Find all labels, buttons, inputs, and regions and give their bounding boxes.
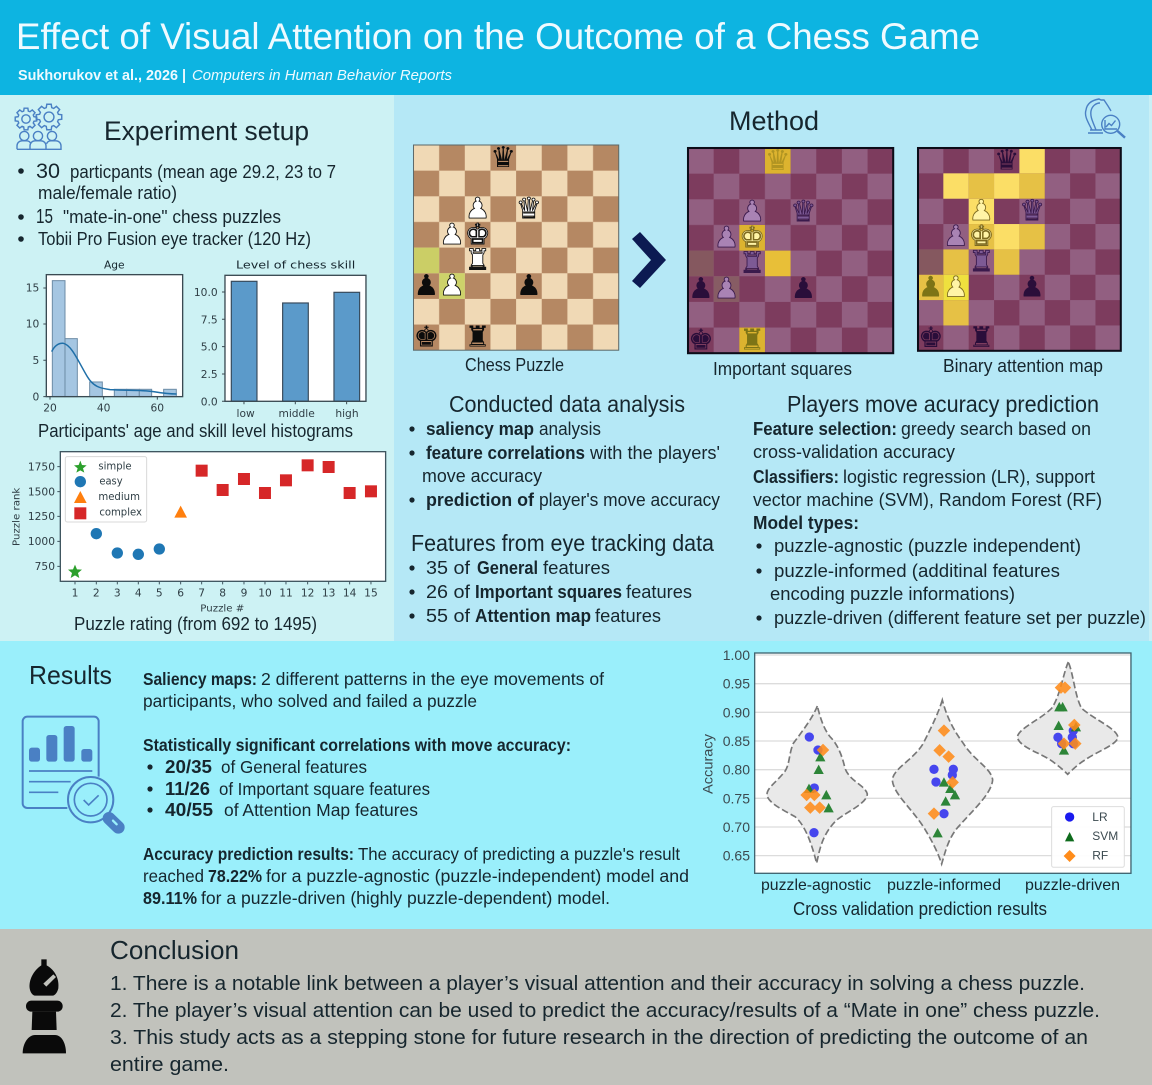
y axis labels: 0.80: [723, 762, 750, 778]
board: important squares: ♟: [739, 194, 765, 228]
text block: players move accuracy prediction: greedy search based on: [901, 419, 1091, 439]
panel: experiment setup: [11, 104, 386, 634]
board: chess puzzle: ♟: [413, 268, 439, 302]
text block: features from eye tracking data: 26 of: [426, 582, 471, 602]
text block: saliency maps: 2 different patterns in the eye movements of: [261, 669, 604, 689]
board: binary attention map: ♟: [1019, 270, 1045, 303]
chart: cross validation violin plot: [700, 647, 1131, 873]
y axis labels: 0.70: [723, 819, 750, 835]
chart: age histogram: 40: [97, 402, 111, 415]
board: binary attention map: ♛: [1019, 194, 1045, 227]
board: important squares: ♚: [688, 322, 714, 356]
chart: age histogram: 5: [33, 354, 39, 367]
board: binary attention map: [918, 144, 1121, 354]
board: binary attention map: ♜: [969, 245, 994, 278]
text block: accuracy prediction results: 89.11%: [143, 888, 197, 908]
y axis labels: Accuracy: [700, 734, 716, 794]
conclusion list: [110, 972, 1100, 1076]
chart: puzzle rating scatter: 13: [322, 587, 335, 600]
chart: puzzle rating scatter: 1: [72, 587, 78, 600]
chart: puzzle rating scatter: 4: [135, 587, 142, 600]
citation: Sukhorukov et al., 2026 |: [18, 67, 186, 84]
scatter legend: simple: [98, 459, 132, 472]
text block: conducted data analysis: Conducted data analysis: [449, 391, 685, 417]
chart: level of chess skill: 2.5: [201, 368, 218, 381]
chart: puzzle rating scatter: 14: [343, 587, 357, 600]
chart: puzzle rating scatter: Puzzle #: [200, 603, 244, 614]
chart: age histogram: 15: [26, 282, 39, 295]
y axis labels: 1.00: [723, 647, 750, 663]
chart: level of chess skill: 10.0: [194, 286, 218, 299]
board: important squares: ♟: [791, 271, 816, 305]
conclusion list: 1. There is a notable link between a player’s visual attention and their accuracy in solving a chess puzzle.: [110, 972, 1085, 995]
board: chess puzzle: ♜: [465, 242, 491, 276]
conclusion list: 2. The player’s visual attention can be used to predict the accuracy/results of a “Mate in one” chess puzzle.: [110, 999, 1100, 1022]
chart: puzzle rating scatter: 9: [241, 587, 248, 600]
board: chess puzzle: ♚: [465, 217, 491, 251]
caption: histograms: Participants' age and skill level histograms: [38, 421, 353, 441]
text block: features from eye tracking data: Important squares: [475, 582, 622, 602]
setup bullet list: [18, 160, 336, 249]
text block: accuracy prediction results: Accuracy prediction results:: [143, 844, 354, 864]
chart: puzzle rating scatter: 10: [258, 587, 272, 600]
chart: level of chess skill: high: [335, 407, 359, 420]
scatter legend: complex: [99, 506, 142, 519]
text block: saliency maps: Saliency maps:: [143, 669, 257, 689]
violin x labels: [761, 877, 1120, 894]
icon: knight with magnifier: [1085, 99, 1125, 138]
board: chess puzzle: ♜: [465, 319, 491, 353]
scatter legend: [65, 457, 147, 522]
chart: age histogram: 10: [26, 318, 40, 331]
violin legend: [1052, 807, 1124, 867]
panel: results: [23, 647, 1131, 919]
text block: players move accuracy prediction: logistic regression (LR), support: [843, 467, 1095, 487]
chart: level of chess skill: [194, 259, 366, 420]
chart: age histogram: 60: [151, 402, 164, 415]
chart: puzzle rating scatter: 3: [114, 587, 121, 600]
citation: Computers in Human Behavior Reports: [192, 67, 452, 84]
setup bullet list: particpants (mean age 29.2, 23 to 7: [70, 162, 336, 182]
chart: level of chess skill: Level of chess skill: [236, 259, 355, 272]
chart: puzzle rating scatter: 12: [301, 587, 314, 600]
text block: players move accuracy prediction: encoding puzzle informations): [770, 584, 1015, 604]
icon: report with magnifier: [23, 717, 118, 827]
board: chess puzzle: ♟: [439, 217, 465, 251]
violin points: LR: [805, 726, 1078, 837]
heading: experiment setup: Experiment setup: [104, 116, 309, 146]
chart: age histogram: [26, 259, 183, 415]
text block: conducted data analysis: analysis: [539, 419, 601, 439]
text block: statistically significant correlations: [143, 735, 571, 820]
setup bullet list: Tobii Pro Fusion eye tracker (120 Hz): [38, 229, 311, 249]
text block: players move accuracy prediction: Classifiers:: [753, 467, 839, 487]
setup bullet list: 30: [36, 160, 60, 183]
chart: puzzle rating scatter: 6: [177, 587, 184, 600]
violin x labels: puzzle-informed: [887, 877, 1001, 894]
icon: gears and people: [15, 104, 62, 149]
text block: accuracy prediction results: for a puzzle-agnostic (puzzle-independent) model and: [266, 866, 689, 886]
setup bullet list: male/female ratio): [38, 183, 177, 203]
text block: players move accuracy prediction: Players move acuracy prediction: [787, 391, 1099, 417]
chart: puzzle rating scatter: 750: [35, 560, 55, 573]
board: binary attention map: ♚: [969, 220, 994, 253]
board: chess puzzle: ♛: [490, 140, 516, 174]
text block: features from eye tracking data: [409, 530, 714, 626]
caption: puzzle rating: Puzzle rating (from 692 to 1495): [74, 614, 317, 634]
chart: puzzle rating scatter: 15: [364, 587, 378, 600]
board: important squares: ♜: [739, 322, 765, 356]
y axis labels: 0.85: [723, 733, 750, 749]
scatter legend: medium: [98, 490, 140, 503]
violin points: SVM: [805, 703, 1080, 837]
chart: level of chess skill: middle: [278, 407, 315, 420]
text block: conducted data analysis: with the players': [589, 443, 720, 463]
text block: players move accuracy prediction: vector machine (SVM), Random Forest (RF): [753, 490, 1102, 510]
text block: statistically significant correlations: Statistically significant correlations with move accuracy:: [143, 735, 571, 755]
text block: conducted data analysis: feature correlations: [426, 443, 585, 463]
text block: features from eye tracking data: features: [543, 558, 610, 578]
board: important squares: ♚: [739, 220, 765, 254]
text block: conducted data analysis: move accuracy: [422, 466, 542, 486]
setup bullet list: 15: [36, 206, 53, 228]
chart: age histogram: 20: [43, 402, 57, 415]
caption: binary attention map: Binary attention map: [943, 356, 1103, 376]
y axis labels: 0.75: [723, 790, 750, 806]
panel: method: [409, 99, 1146, 628]
text block: features from eye tracking data: Attention map: [475, 606, 591, 626]
chart: level of chess skill: low: [237, 407, 255, 420]
board: binary attention map: ♟: [969, 194, 994, 227]
board: binary attention map: ♜: [969, 321, 994, 354]
board: chess puzzle: ♟: [465, 191, 491, 225]
header banner: [0, 0, 1152, 95]
board: important squares: ♛: [791, 194, 816, 228]
text block: statistically significant correlations: of General features: [221, 757, 367, 777]
arrow: chevron: [632, 232, 666, 288]
text block: saliency maps: participants, who solved and failed a puzzle: [143, 691, 477, 711]
chart: age histogram: 0: [33, 390, 40, 403]
text block: features from eye tracking data: features: [595, 606, 661, 626]
conclusion list: 3. This study acts as a stepping stone for future research in the direction of predicting the outcome of an: [110, 1026, 1088, 1049]
panel: conclusion: [23, 935, 1100, 1076]
y axis labels: 0.90: [723, 704, 750, 720]
text block: features from eye tracking data: 55 of: [426, 606, 471, 626]
text block: accuracy prediction results: reached: [143, 866, 204, 886]
chart: puzzle rating scatter: 1750: [28, 460, 55, 473]
text block: features from eye tracking data: Features from eye tracking data: [411, 530, 714, 556]
conclusion list: entire game.: [110, 1053, 229, 1076]
text block: players move accuracy prediction: puzzle-informed (additinal features: [774, 561, 1060, 581]
text block: players move accuracy prediction: puzzle-driven (different feature set per puzzle): [774, 608, 1146, 628]
text block: conducted data analysis: player's move accuracy: [539, 490, 720, 510]
board: important squares: ♟: [688, 271, 714, 305]
text block: players move accuracy prediction: Model types:: [753, 513, 859, 533]
chart: age histogram: Age: [104, 259, 125, 272]
text block: conducted data analysis: saliency map: [426, 419, 534, 439]
caption: important squares: Important squares: [713, 359, 852, 379]
chart: puzzle rating scatter: 1250: [28, 510, 55, 523]
text block: features from eye tracking data: features: [626, 582, 692, 602]
chart: puzzle rating scatter: 11: [279, 587, 293, 600]
board: important squares: [688, 143, 893, 356]
board: chess puzzle: ♟: [439, 268, 465, 302]
y axis labels: 0.65: [723, 848, 750, 864]
text block: conducted data analysis: [409, 391, 720, 510]
icon: bishop: [23, 959, 66, 1053]
text block: accuracy prediction results: for a puzzle-driven (highly puzzle-dependent) model.: [201, 888, 610, 908]
text block: players move accuracy prediction: cross-validation accuracy: [753, 442, 955, 462]
text block: statistically significant correlations: 11/26: [165, 778, 210, 799]
chart: level of chess skill: 5.0: [201, 341, 218, 354]
scatter legend: easy: [99, 475, 123, 488]
text block: conducted data analysis: prediction of: [426, 490, 535, 510]
caption: chess puzzle: Chess Puzzle: [465, 355, 564, 375]
text block: saliency maps: [143, 669, 604, 711]
heading: method: Method: [729, 106, 819, 136]
chart: puzzle rating scatter: 1500: [28, 485, 55, 498]
heading: results: Results: [29, 660, 112, 690]
chart: level of chess skill: 0.0: [201, 395, 218, 408]
board: important squares: ♛: [765, 143, 791, 177]
chart: puzzle rating scatter: [11, 452, 386, 614]
board: binary attention map: ♟: [918, 270, 943, 303]
board: binary attention map: ♛: [994, 144, 1019, 177]
board: binary attention map: ♟: [943, 270, 969, 303]
text block: statistically significant correlations: 40/55: [165, 799, 213, 820]
text block: accuracy prediction results: [143, 844, 689, 908]
violin legend: RF: [1092, 849, 1108, 863]
text block: accuracy prediction results: The accuracy of predicting a puzzle's result: [358, 844, 680, 864]
caption: cross validation: Cross validation prediction results: [793, 899, 1047, 919]
text block: accuracy prediction results: 78.22%: [208, 866, 262, 886]
heading: conclusion: Conclusion: [110, 935, 239, 965]
text block: features from eye tracking data: 35 of: [426, 558, 471, 578]
y axis labels: [700, 647, 750, 864]
chart: puzzle rating scatter: 2: [93, 587, 100, 600]
violin points: RF: [801, 682, 1081, 819]
board: chess puzzle: ♚: [413, 319, 439, 353]
board: important squares: ♜: [739, 245, 765, 279]
text block: players move accuracy prediction: [753, 391, 1146, 628]
violin x labels: puzzle-agnostic: [761, 877, 871, 894]
board: chess puzzle: [413, 140, 619, 353]
text block: statistically significant correlations: of Attention Map features: [224, 800, 418, 820]
citation: [18, 67, 452, 84]
chart: puzzle rating scatter: 7: [198, 587, 205, 600]
chart: puzzle rating scatter: 8: [219, 587, 226, 600]
setup bullet list: "mate-in-one" chess puzzles: [63, 207, 281, 227]
text block: statistically significant correlations: 20/35: [165, 756, 212, 777]
board: important squares: ♟: [714, 220, 739, 254]
chart: level of chess skill: 7.5: [201, 313, 218, 326]
board: important squares: ♟: [714, 271, 739, 305]
violin x labels: puzzle-driven: [1025, 877, 1120, 894]
text block: players move accuracy prediction: puzzle-agnostic (puzzle independent): [774, 536, 1081, 556]
violin legend: SVM: [1092, 829, 1118, 843]
chart: puzzle rating scatter: 5: [156, 587, 163, 600]
violin legend: LR: [1092, 810, 1108, 824]
y axis labels: 0.95: [723, 676, 750, 692]
chart: puzzle rating scatter: 1000: [28, 535, 55, 548]
board: chess puzzle: ♟: [516, 268, 542, 302]
chart: puzzle rating scatter: Puzzle rank: [11, 487, 22, 546]
text block: features from eye tracking data: General: [477, 558, 538, 578]
title: Effect of Visual Attention on the Outcome of a Chess Game: [16, 16, 980, 57]
text block: statistically significant correlations: of Important square features: [219, 779, 430, 799]
board: chess puzzle: ♛: [516, 191, 542, 225]
text block: players move accuracy prediction: Feature selection:: [753, 419, 897, 439]
board: binary attention map: ♚: [918, 321, 943, 354]
board: binary attention map: ♟: [943, 220, 969, 253]
